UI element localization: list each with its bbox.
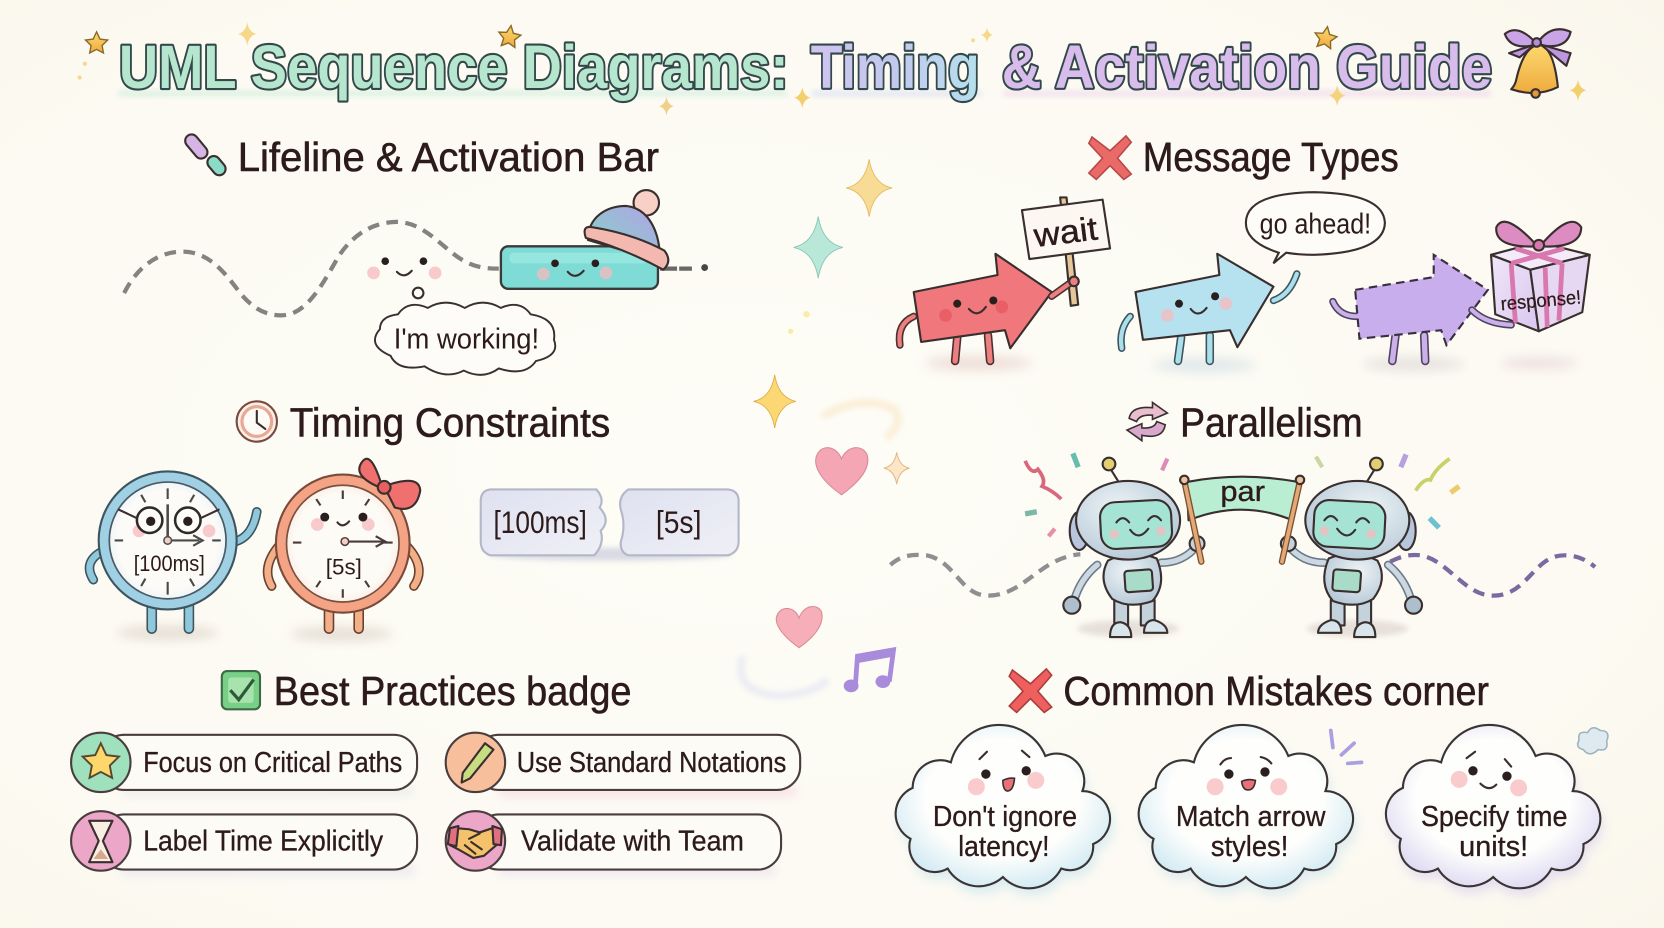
cloud: specify time units: units! xyxy=(1459,831,1528,863)
title part: purple: & Activation Guide xyxy=(1002,33,1492,102)
badge: focus on critical paths: Focus on Critical Paths xyxy=(143,747,402,779)
heading: common mistakes: Common Mistakes corner xyxy=(1063,668,1489,714)
title part: green: UML Sequence Diagrams: xyxy=(119,33,788,102)
title shadow xyxy=(119,90,1491,97)
icon: bell with bow xyxy=(1505,29,1571,98)
cloud: specify time units xyxy=(1386,725,1608,896)
knit hat xyxy=(585,190,668,270)
thought bubble: I'm working: I'm working! xyxy=(394,323,539,355)
trailing lifeline dashes xyxy=(660,264,708,271)
dashed lifeline left xyxy=(890,554,1080,596)
panel: message types xyxy=(899,134,1590,373)
cloud: don't ignore latency xyxy=(896,725,1113,896)
heading: timing constraints: Timing Constraints xyxy=(290,399,610,445)
icon: green check xyxy=(222,671,260,709)
icon: red cross xyxy=(1089,136,1131,179)
async arrow character with speech bubble xyxy=(1121,192,1385,361)
blue clock character: [100ms] xyxy=(134,551,205,576)
sync arrow character with sign: wait xyxy=(1031,209,1100,254)
panel: common mistakes corner xyxy=(896,668,1608,896)
chips: timing labels: [100ms] xyxy=(493,504,587,540)
return arrow character with gift xyxy=(1333,222,1590,361)
cloud: match arrow styles xyxy=(1139,725,1362,896)
heading: lifeline: Lifeline & Activation Bar xyxy=(238,134,659,180)
icon: capsules xyxy=(183,132,228,178)
chips: timing labels xyxy=(481,489,739,561)
cloud: match arrow styles: styles! xyxy=(1211,831,1288,863)
blue clock character xyxy=(89,471,257,629)
badge: use standard notations: Use Standard Notations xyxy=(517,747,786,779)
orange clock character: [5s] xyxy=(326,554,362,579)
cloud: match arrow styles: Match arrow xyxy=(1176,801,1326,833)
dashed lifeline right xyxy=(1390,555,1595,596)
heading: message types: Message Types xyxy=(1143,134,1399,180)
cloud: don't ignore latency: latency! xyxy=(958,831,1050,863)
badge: validate with team xyxy=(446,811,781,871)
activation bar character xyxy=(501,246,658,289)
robot left xyxy=(1063,458,1204,637)
heading: best practices: Best Practices badge xyxy=(274,668,631,714)
badge: use standard notations xyxy=(446,733,800,792)
cloud: specify time units: Specify time xyxy=(1421,801,1567,833)
robot right xyxy=(1281,458,1422,637)
confetti xyxy=(1025,453,1459,536)
panel: best practices badge xyxy=(71,668,800,874)
icon: red cross xyxy=(1009,669,1052,712)
badge: validate with team: Validate with Team xyxy=(521,825,744,857)
pill shadows xyxy=(122,786,796,874)
center sparkles and hearts xyxy=(741,159,909,695)
icon: clock xyxy=(237,401,277,442)
async arrow character with speech bubble: go ahead! xyxy=(1260,209,1371,241)
orange clock character xyxy=(268,459,420,629)
title sparkles and stars xyxy=(77,22,1587,116)
badge: label time explicitly xyxy=(71,811,417,871)
ground shadows xyxy=(925,356,1577,373)
icon: refresh arrows xyxy=(1127,402,1167,441)
dashed lifeline xyxy=(124,222,499,315)
badge: focus on critical paths xyxy=(71,733,417,792)
return arrow character with gift: response! xyxy=(1500,287,1582,315)
clock shadows xyxy=(117,625,393,641)
title part: timing: Timing xyxy=(811,33,980,102)
lifeline face xyxy=(367,257,441,279)
chips: timing labels: [5s] xyxy=(656,504,701,540)
panel: timing constraints xyxy=(89,399,739,641)
panel: parallelism xyxy=(890,399,1595,637)
title xyxy=(119,33,1492,102)
sync arrow character with sign xyxy=(899,197,1110,361)
par banner xyxy=(1180,476,1304,562)
panel: lifeline and activation bar xyxy=(124,132,708,375)
badge: label time explicitly: Label Time Explicitly xyxy=(143,825,384,857)
par banner: par xyxy=(1220,476,1265,508)
thought bubble: I'm working xyxy=(375,288,555,375)
heading: parallelism: Parallelism xyxy=(1180,399,1363,445)
cloud: don't ignore latency: Don't ignore xyxy=(933,801,1077,833)
